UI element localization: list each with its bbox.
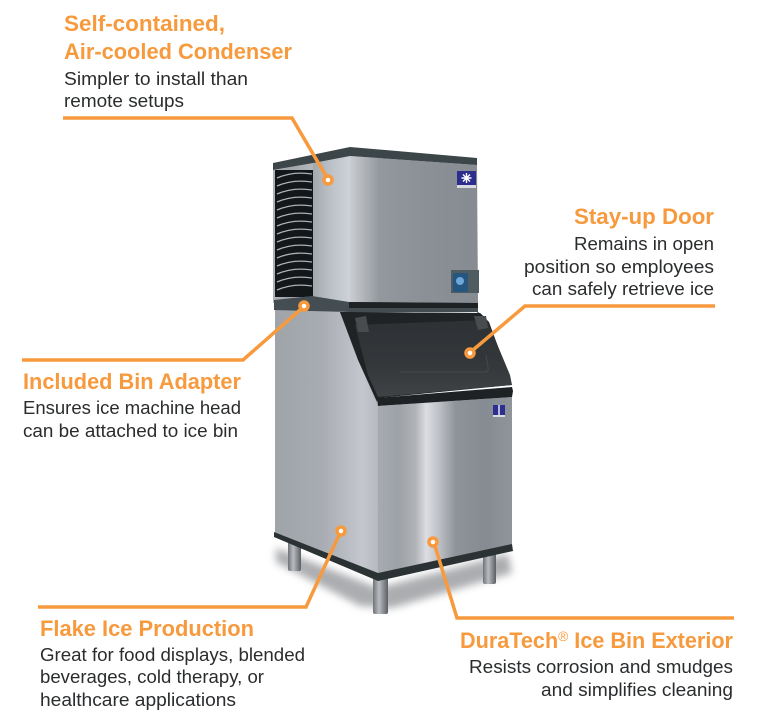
- text: door description: [524, 234, 714, 299]
- bin logo badge: [493, 405, 505, 417]
- heading: condenser: Air-cooled Condenser: [64, 39, 292, 64]
- heading: duratech exterior: ®: [558, 628, 569, 644]
- condenser louvers: [277, 173, 312, 290]
- text: door description: Remains in open: [574, 234, 714, 254]
- callout: stay-up door: [466, 204, 715, 357]
- text: bin adapter description: [23, 398, 241, 441]
- head logo badge: [457, 171, 476, 188]
- text: door description: can safely retrieve ice: [532, 279, 714, 299]
- marker: condenser: [324, 176, 332, 184]
- stay-up door: [340, 312, 513, 406]
- ice machine head: [273, 147, 479, 312]
- head base band: [274, 296, 478, 312]
- heading: flake ice: Flake Ice Production: [40, 616, 254, 641]
- heading: condenser: [64, 11, 292, 64]
- callout: flake ice: [38, 527, 345, 710]
- text: duratech description: and simplifies cleaning: [541, 680, 733, 700]
- text: condenser description: remote setups: [64, 91, 184, 111]
- leader line: flake ice: [38, 535, 339, 607]
- callout: condenser: [63, 11, 332, 184]
- machine top lid: [273, 147, 477, 170]
- power switch: [451, 270, 479, 293]
- heading: condenser: Self-contained,: [64, 11, 225, 36]
- text: condenser description: Simpler to install than: [64, 69, 248, 89]
- text: door description: position so employees: [524, 257, 714, 277]
- ice machine illustration: [273, 147, 513, 614]
- leader line: condenser: [63, 118, 326, 176]
- leader line: bin adapter: [22, 309, 301, 360]
- ice bin: [274, 310, 513, 581]
- machine legs: [288, 540, 496, 614]
- heading: stay-up door: Stay-up Door: [574, 204, 714, 229]
- heading: duratech exterior: DuraTech: [460, 628, 560, 653]
- leader line: duratech: [435, 546, 734, 618]
- text: condenser description: [64, 69, 248, 111]
- leader line: door: [473, 306, 715, 350]
- floor shadow: [276, 548, 512, 608]
- marker: flake ice: [337, 527, 345, 535]
- door base band: [377, 387, 513, 406]
- heading: bin adapter: Included Bin Adapter: [23, 369, 241, 394]
- callout: bin adapter: [22, 302, 308, 441]
- text: duratech description: [469, 657, 733, 700]
- text: bin adapter description: Ensures ice machine head: [23, 398, 241, 418]
- text: flake ice description: [40, 645, 305, 710]
- marker: duratech: [429, 538, 437, 546]
- marker: door: [466, 349, 474, 357]
- text: flake ice description: beverages, cold therapy, or: [40, 667, 264, 687]
- text: duratech description: Resists corrosion and smudges: [469, 657, 733, 677]
- callout: duratech exterior: [429, 538, 734, 700]
- text: bin adapter description: can be attached to ice bin: [23, 421, 238, 441]
- text: flake ice description: healthcare applications: [40, 690, 236, 710]
- text: flake ice description: Great for food displays, blended: [40, 645, 305, 665]
- marker: bin adapter: [300, 302, 308, 310]
- heading: duratech exterior: Ice Bin Exterior: [568, 628, 733, 653]
